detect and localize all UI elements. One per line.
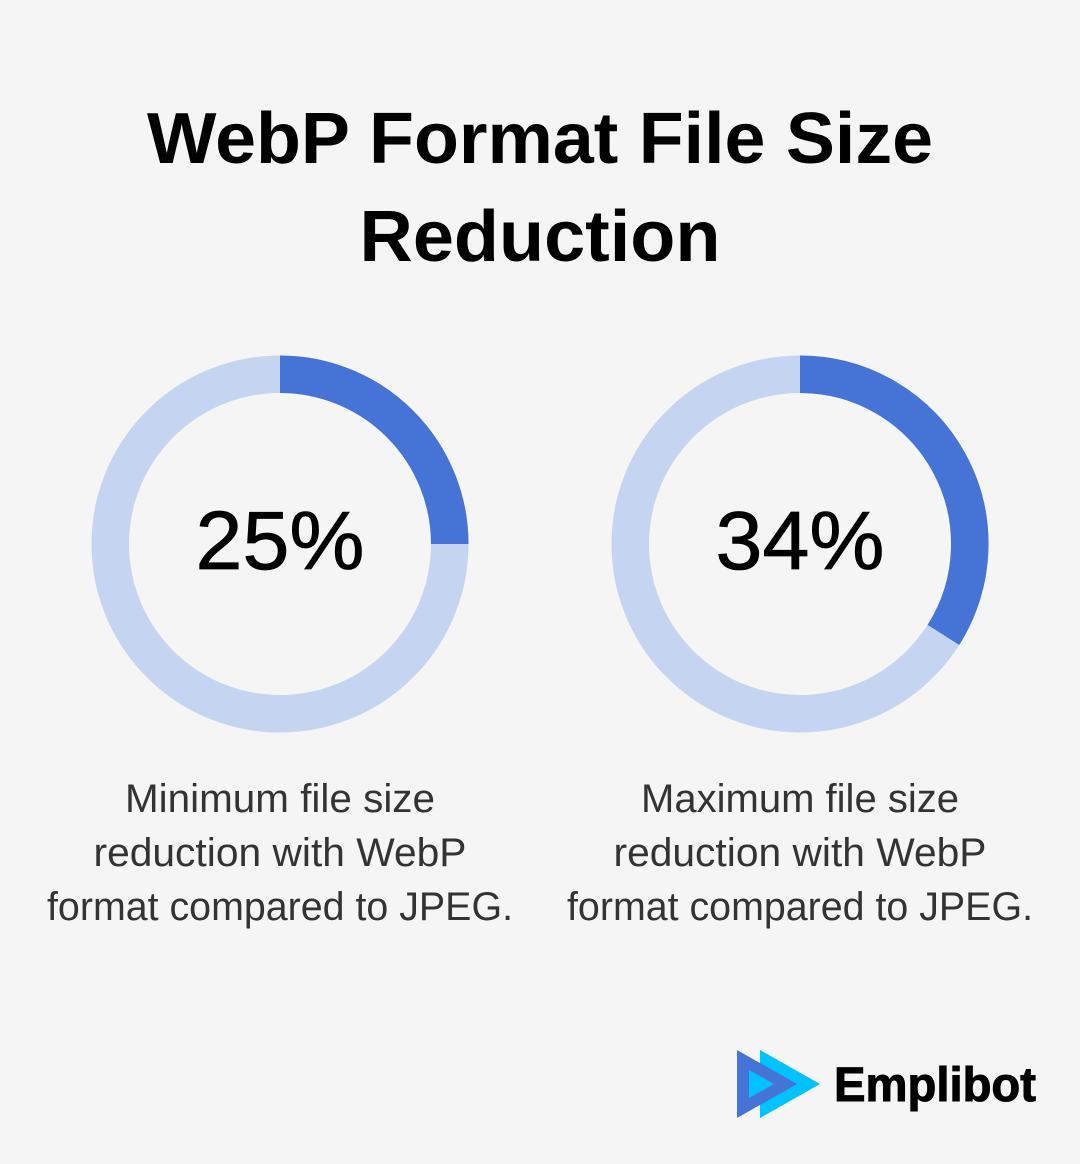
value: 34%: 34%	[716, 494, 884, 587]
donut chart: 25%	[110, 374, 450, 714]
caption: maximum: Maximum file size	[641, 777, 959, 821]
caption: maximum: reduction with WebP	[614, 831, 986, 875]
caption: maximum: format compared to JPEG.	[567, 885, 1033, 929]
caption: maximum	[567, 777, 1033, 929]
panel: minimum reduction	[47, 374, 513, 929]
wordmark: Emplibot	[834, 1059, 1036, 1112]
caption: minimum: reduction with WebP	[94, 831, 466, 875]
logo: Emplibot	[737, 1050, 1036, 1118]
caption: minimum: Minimum file size	[125, 777, 435, 821]
icon: play triangles	[737, 1050, 820, 1118]
donut chart: 34%	[630, 374, 970, 714]
panel: maximum reduction	[567, 374, 1033, 929]
value: 25%: 25%	[196, 494, 364, 587]
title	[147, 99, 933, 277]
title: WebP Format File Size	[147, 99, 933, 179]
caption: minimum	[47, 777, 513, 929]
title: Reduction	[360, 197, 720, 277]
caption: minimum: format compared to JPEG.	[47, 885, 513, 929]
